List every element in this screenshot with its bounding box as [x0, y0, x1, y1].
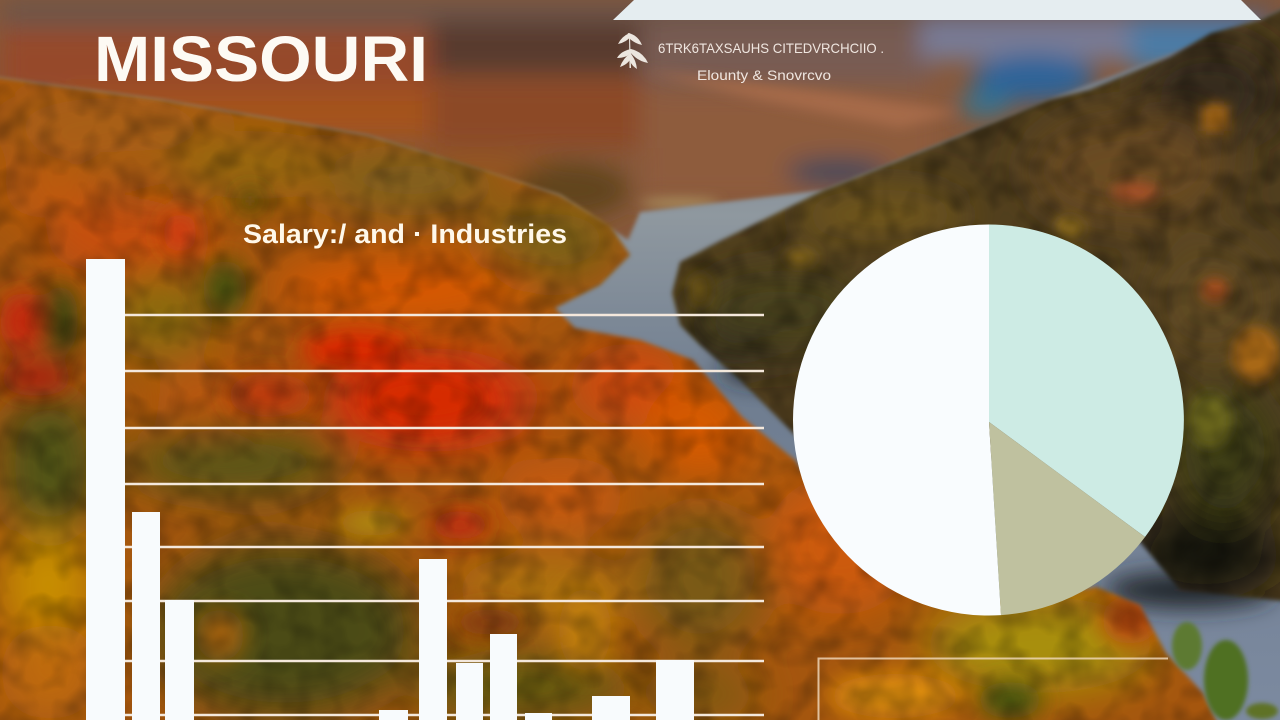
chart gridlines	[125, 315, 764, 715]
river shadows	[720, 358, 1275, 608]
foreground green trees	[1172, 622, 1278, 720]
pie chart	[793, 224, 1184, 616]
bar chart	[86, 259, 764, 720]
chart heading: Salary:/ and · Industries	[243, 219, 567, 249]
chart bars	[86, 259, 694, 720]
title: MISSOURI	[94, 23, 428, 95]
top banner shape	[613, 0, 1261, 20]
pie slice: white	[793, 224, 1001, 616]
icon: pine tree	[617, 33, 648, 69]
outlined panel	[818, 658, 1168, 720]
subtitle text	[658, 40, 884, 83]
pie slice: olive	[989, 422, 1145, 615]
subtitle text: Elounty & Snovrcvo	[697, 67, 831, 83]
right hill	[669, 8, 1280, 604]
subtitle text: 6TRK6TAXSAUHS CITEDVRCHCIIO .	[658, 40, 884, 56]
pie slice: mint	[989, 224, 1184, 537]
far hills	[0, 0, 1280, 260]
